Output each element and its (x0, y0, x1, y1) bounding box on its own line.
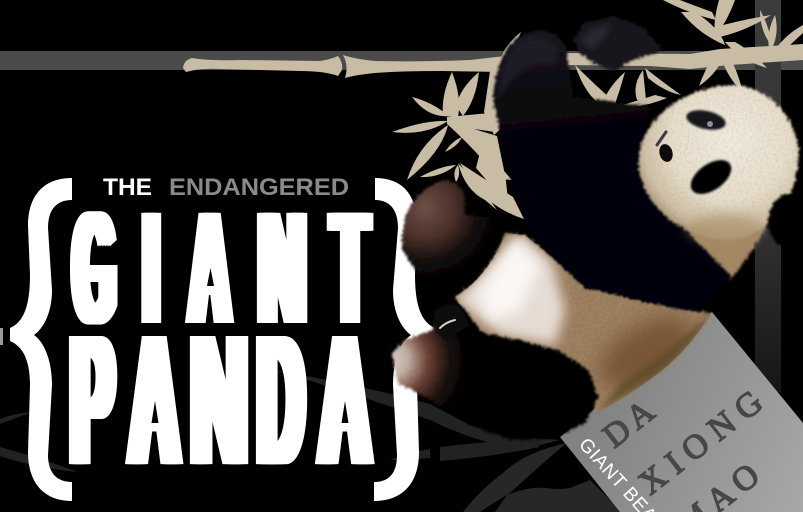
banner lettering: DA (596, 390, 666, 455)
eye patch (685, 107, 727, 133)
faint bamboo shadows (0, 370, 560, 472)
lower head shading (687, 215, 763, 241)
vertical gray bar (755, 0, 781, 392)
torso and raised arm (493, 30, 732, 312)
cheek patch (685, 153, 737, 201)
hind paw (435, 304, 470, 340)
faint leaves at bottom (463, 443, 622, 512)
title: GIANT PANDA: G (74, 178, 114, 357)
banner lettering: XIONG (632, 378, 777, 502)
under-stem leaves (575, 65, 612, 107)
upper paw (573, 16, 663, 72)
banner ribbon (560, 312, 803, 512)
panda (392, 16, 803, 440)
horizontal gray bar (0, 51, 803, 70)
hind paw claw (440, 320, 455, 328)
title: GIANT PANDA: N (191, 296, 247, 504)
head (639, 85, 799, 239)
title: GIANT PANDA: N (259, 178, 305, 357)
title: GIANT PANDA: D (258, 296, 304, 504)
left leaf cluster (412, 97, 449, 116)
title: GIANT PANDA: I (144, 178, 158, 357)
title: GIANT PANDA: P (71, 296, 113, 504)
small mark at left edge (0, 328, 3, 345)
subtitle: THE (103, 174, 152, 201)
left brace (10, 178, 72, 501)
nose (657, 143, 675, 163)
muzzle mark (657, 132, 666, 145)
far arm (402, 180, 517, 290)
right stem (565, 44, 803, 69)
eye (707, 121, 713, 127)
right brace (374, 178, 435, 501)
neck (680, 205, 772, 280)
top-right leaf cluster (663, 0, 716, 20)
title: GIANT PANDA: A (320, 296, 370, 504)
belly colour (455, 232, 712, 412)
subtitle: ENDANGERED (169, 174, 349, 201)
raised arm highlight (497, 38, 558, 100)
bamboo stem with leaves (183, 0, 803, 219)
counters of letter A (152, 268, 348, 423)
belly (455, 233, 712, 412)
title: GIANT PANDA: T (332, 178, 368, 357)
leg (392, 302, 598, 440)
ear (768, 194, 803, 248)
title: GIANT PANDA: A (130, 296, 179, 504)
upper paw highlight (580, 24, 612, 50)
banner: Da Xiong Mao (560, 312, 803, 512)
left stem segments (183, 56, 342, 76)
title: GIANT PANDA: A (190, 178, 230, 357)
